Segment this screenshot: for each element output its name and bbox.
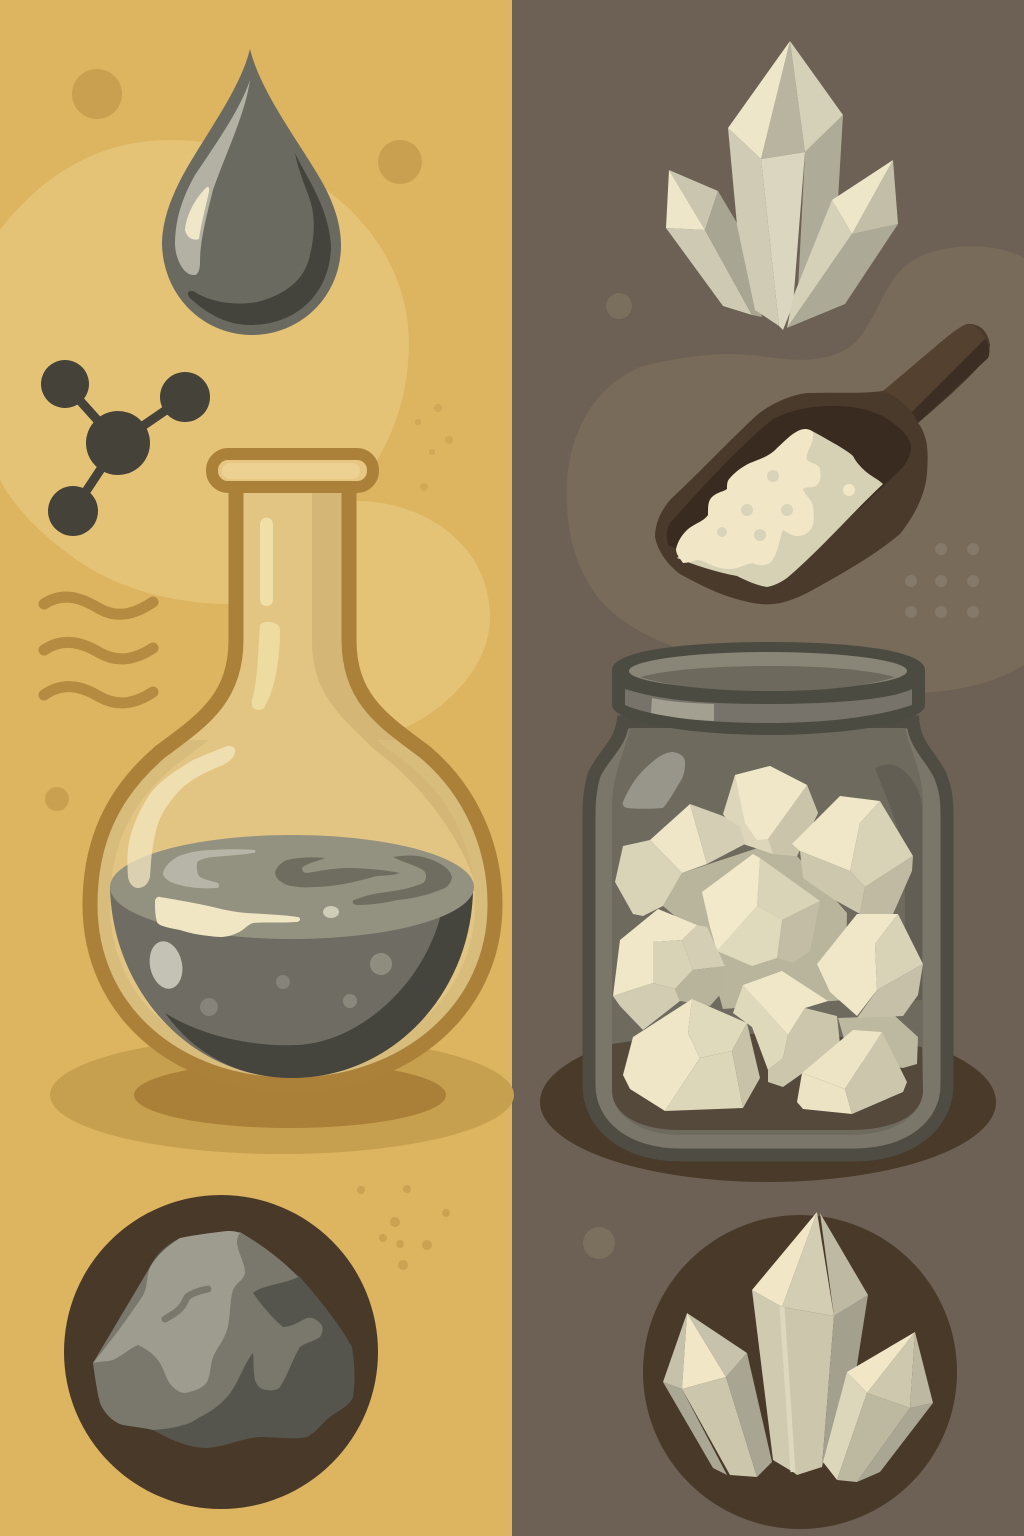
lump upper left: [615, 804, 745, 916]
panel: right taupe background: [512, 0, 1024, 1536]
flask outline: [90, 480, 495, 1085]
neck and shoulder shading: [312, 488, 488, 900]
lump lower left: [623, 999, 760, 1111]
right crystal: [823, 1332, 933, 1482]
jar of white crystals: [589, 722, 947, 1155]
lump upper right: [792, 796, 913, 914]
flask glass body: [90, 480, 495, 1085]
lump top middle: [723, 766, 818, 856]
flask lip: [212, 454, 373, 487]
liquid: [110, 835, 474, 1078]
icon: molecule: [41, 360, 210, 536]
jar glass body: [589, 722, 947, 1155]
jar floor: [612, 1034, 923, 1130]
left crystal: [663, 1313, 772, 1477]
inner rim of bulb: [98, 740, 488, 1076]
icon: wooden scoop with powder: [655, 324, 990, 604]
icon: oil drop: [162, 49, 341, 335]
icon: faceted quartz crystal top: [666, 41, 898, 330]
crystal lumps: [613, 766, 923, 1114]
panel: left amber background: [0, 0, 512, 1536]
icon: quartz crystals in dark circle: [643, 1212, 957, 1529]
inner glass: [612, 728, 923, 1135]
shadow under jar: [540, 1022, 996, 1182]
flask with liquid: [90, 480, 495, 1085]
icon: coal rock in dark circle: [64, 1195, 378, 1509]
lump middle right: [817, 914, 923, 1018]
lump centre: [702, 854, 820, 966]
glass highlights: [260, 518, 273, 606]
shadow under flask: [50, 1036, 514, 1154]
glass shade: [875, 764, 922, 1000]
jar lid rim: [612, 642, 925, 735]
centre crystal: [752, 1212, 868, 1475]
lump middle left: [613, 909, 725, 1030]
icon: vapour waves: [44, 597, 153, 703]
glass highlight: [623, 752, 685, 809]
lump lower middle: [733, 971, 840, 1087]
lump lower right: [797, 1030, 907, 1114]
